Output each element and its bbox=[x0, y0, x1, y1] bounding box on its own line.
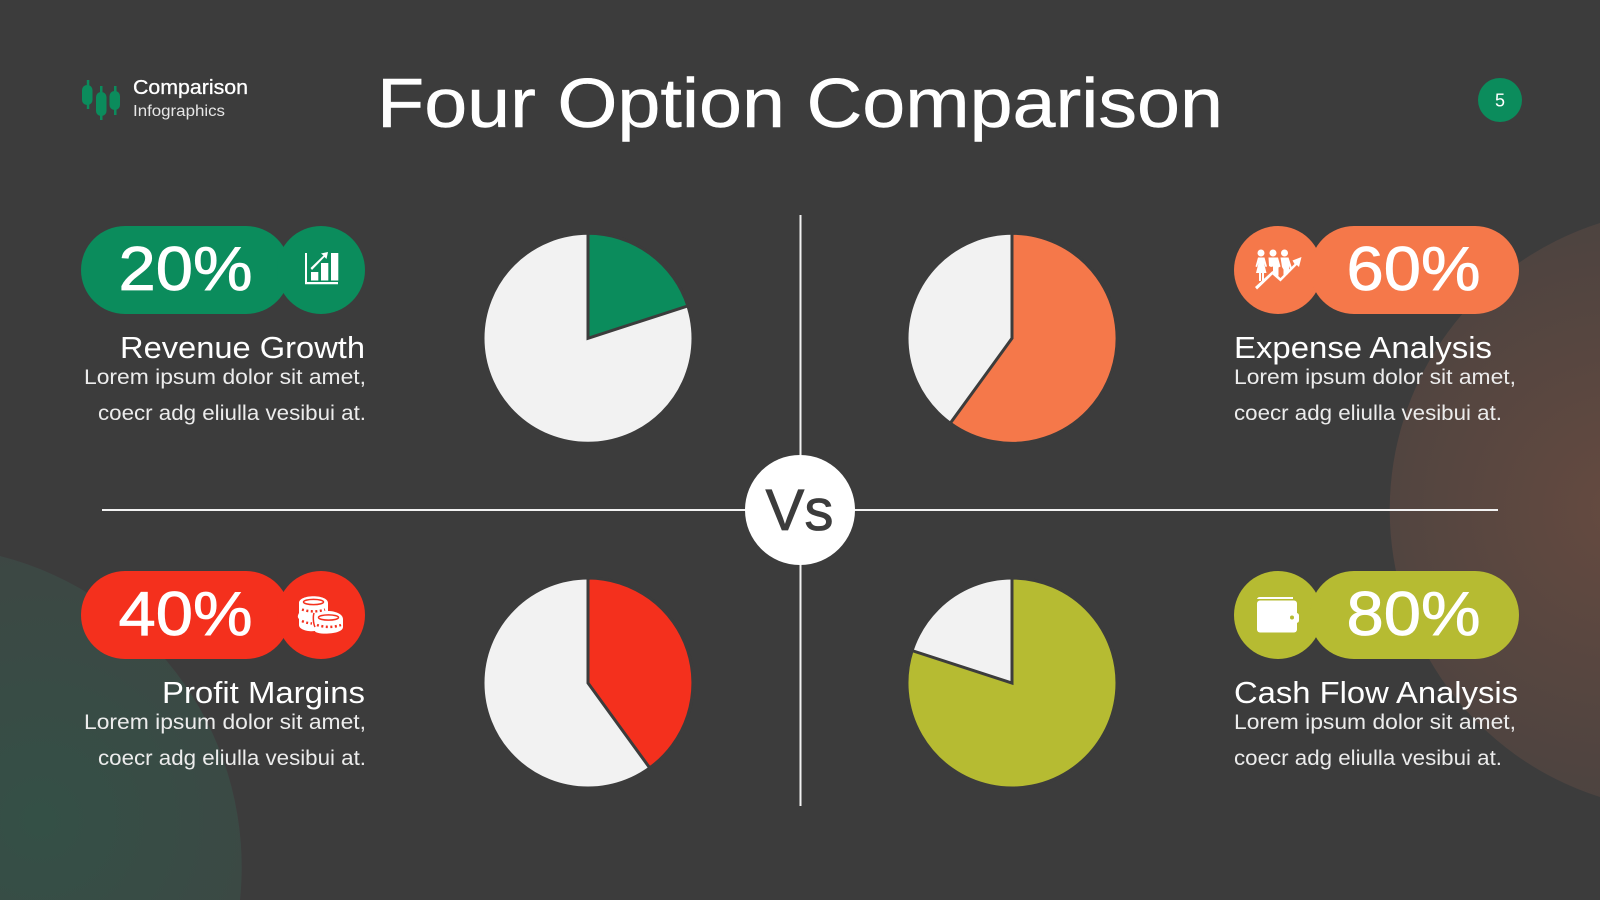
description bbox=[84, 366, 366, 425]
panel: profit margins bbox=[81, 571, 693, 788]
percentage pill: 20% bbox=[81, 226, 365, 314]
icon: candlesticks bbox=[82, 80, 120, 120]
percentage pill: 40%: 40% bbox=[118, 580, 252, 649]
panel: cash flow analysis bbox=[907, 571, 1519, 788]
icon: team with rising arrow bbox=[1255, 250, 1302, 290]
panel: revenue growth bbox=[81, 226, 693, 443]
description bbox=[84, 711, 366, 770]
description: coecr adg eliulla vesibui at. bbox=[98, 747, 366, 770]
pie chart: 20% bbox=[483, 233, 693, 443]
description: coecr adg eliulla vesibui at. bbox=[1234, 402, 1502, 425]
vs badge bbox=[745, 455, 855, 565]
percentage pill: 80% bbox=[1234, 571, 1519, 659]
panel: expense analysis bbox=[907, 226, 1519, 443]
vs badge: Vs bbox=[766, 478, 834, 543]
cross divider bbox=[102, 215, 1498, 806]
page number badge: 5 bbox=[1495, 90, 1505, 110]
description: coecr adg eliulla vesibui at. bbox=[1234, 747, 1502, 770]
logo subtitle: Infographics bbox=[133, 103, 225, 120]
description: Lorem ipsum dolor sit amet, bbox=[84, 711, 366, 734]
percentage pill: 60%: 60% bbox=[1346, 235, 1480, 304]
percentage pill: 80%: 80% bbox=[1346, 580, 1480, 649]
logo title: Comparison bbox=[133, 76, 248, 99]
percentage pill: 20%: 20% bbox=[118, 235, 252, 304]
pie chart: 80% bbox=[907, 578, 1117, 788]
description bbox=[1234, 366, 1516, 425]
pie chart: 60% bbox=[907, 233, 1117, 443]
heading: expense analysis: Expense Analysis bbox=[1234, 330, 1492, 365]
percentage pill: 60% bbox=[1234, 226, 1519, 314]
page number badge bbox=[1478, 78, 1522, 122]
heading: profit margins: Profit Margins bbox=[162, 675, 365, 710]
description: Lorem ipsum dolor sit amet, bbox=[84, 366, 366, 389]
heading: cash flow analysis: Cash Flow Analysis bbox=[1234, 675, 1518, 710]
title: Four Option Comparison bbox=[377, 64, 1223, 142]
description: coecr adg eliulla vesibui at. bbox=[98, 402, 366, 425]
description bbox=[1234, 711, 1516, 770]
pie chart: 40% bbox=[483, 578, 693, 788]
logo: candlestick mark with wordmark bbox=[82, 76, 248, 120]
description: Lorem ipsum dolor sit amet, bbox=[1234, 711, 1516, 734]
icon: bar chart with arrow bbox=[305, 252, 338, 284]
icon: coin stacks bbox=[298, 596, 343, 634]
percentage pill: 40% bbox=[81, 571, 365, 659]
description: Lorem ipsum dolor sit amet, bbox=[1234, 366, 1516, 389]
icon: wallet bbox=[1257, 597, 1299, 632]
heading: revenue growth: Revenue Growth bbox=[120, 330, 365, 365]
